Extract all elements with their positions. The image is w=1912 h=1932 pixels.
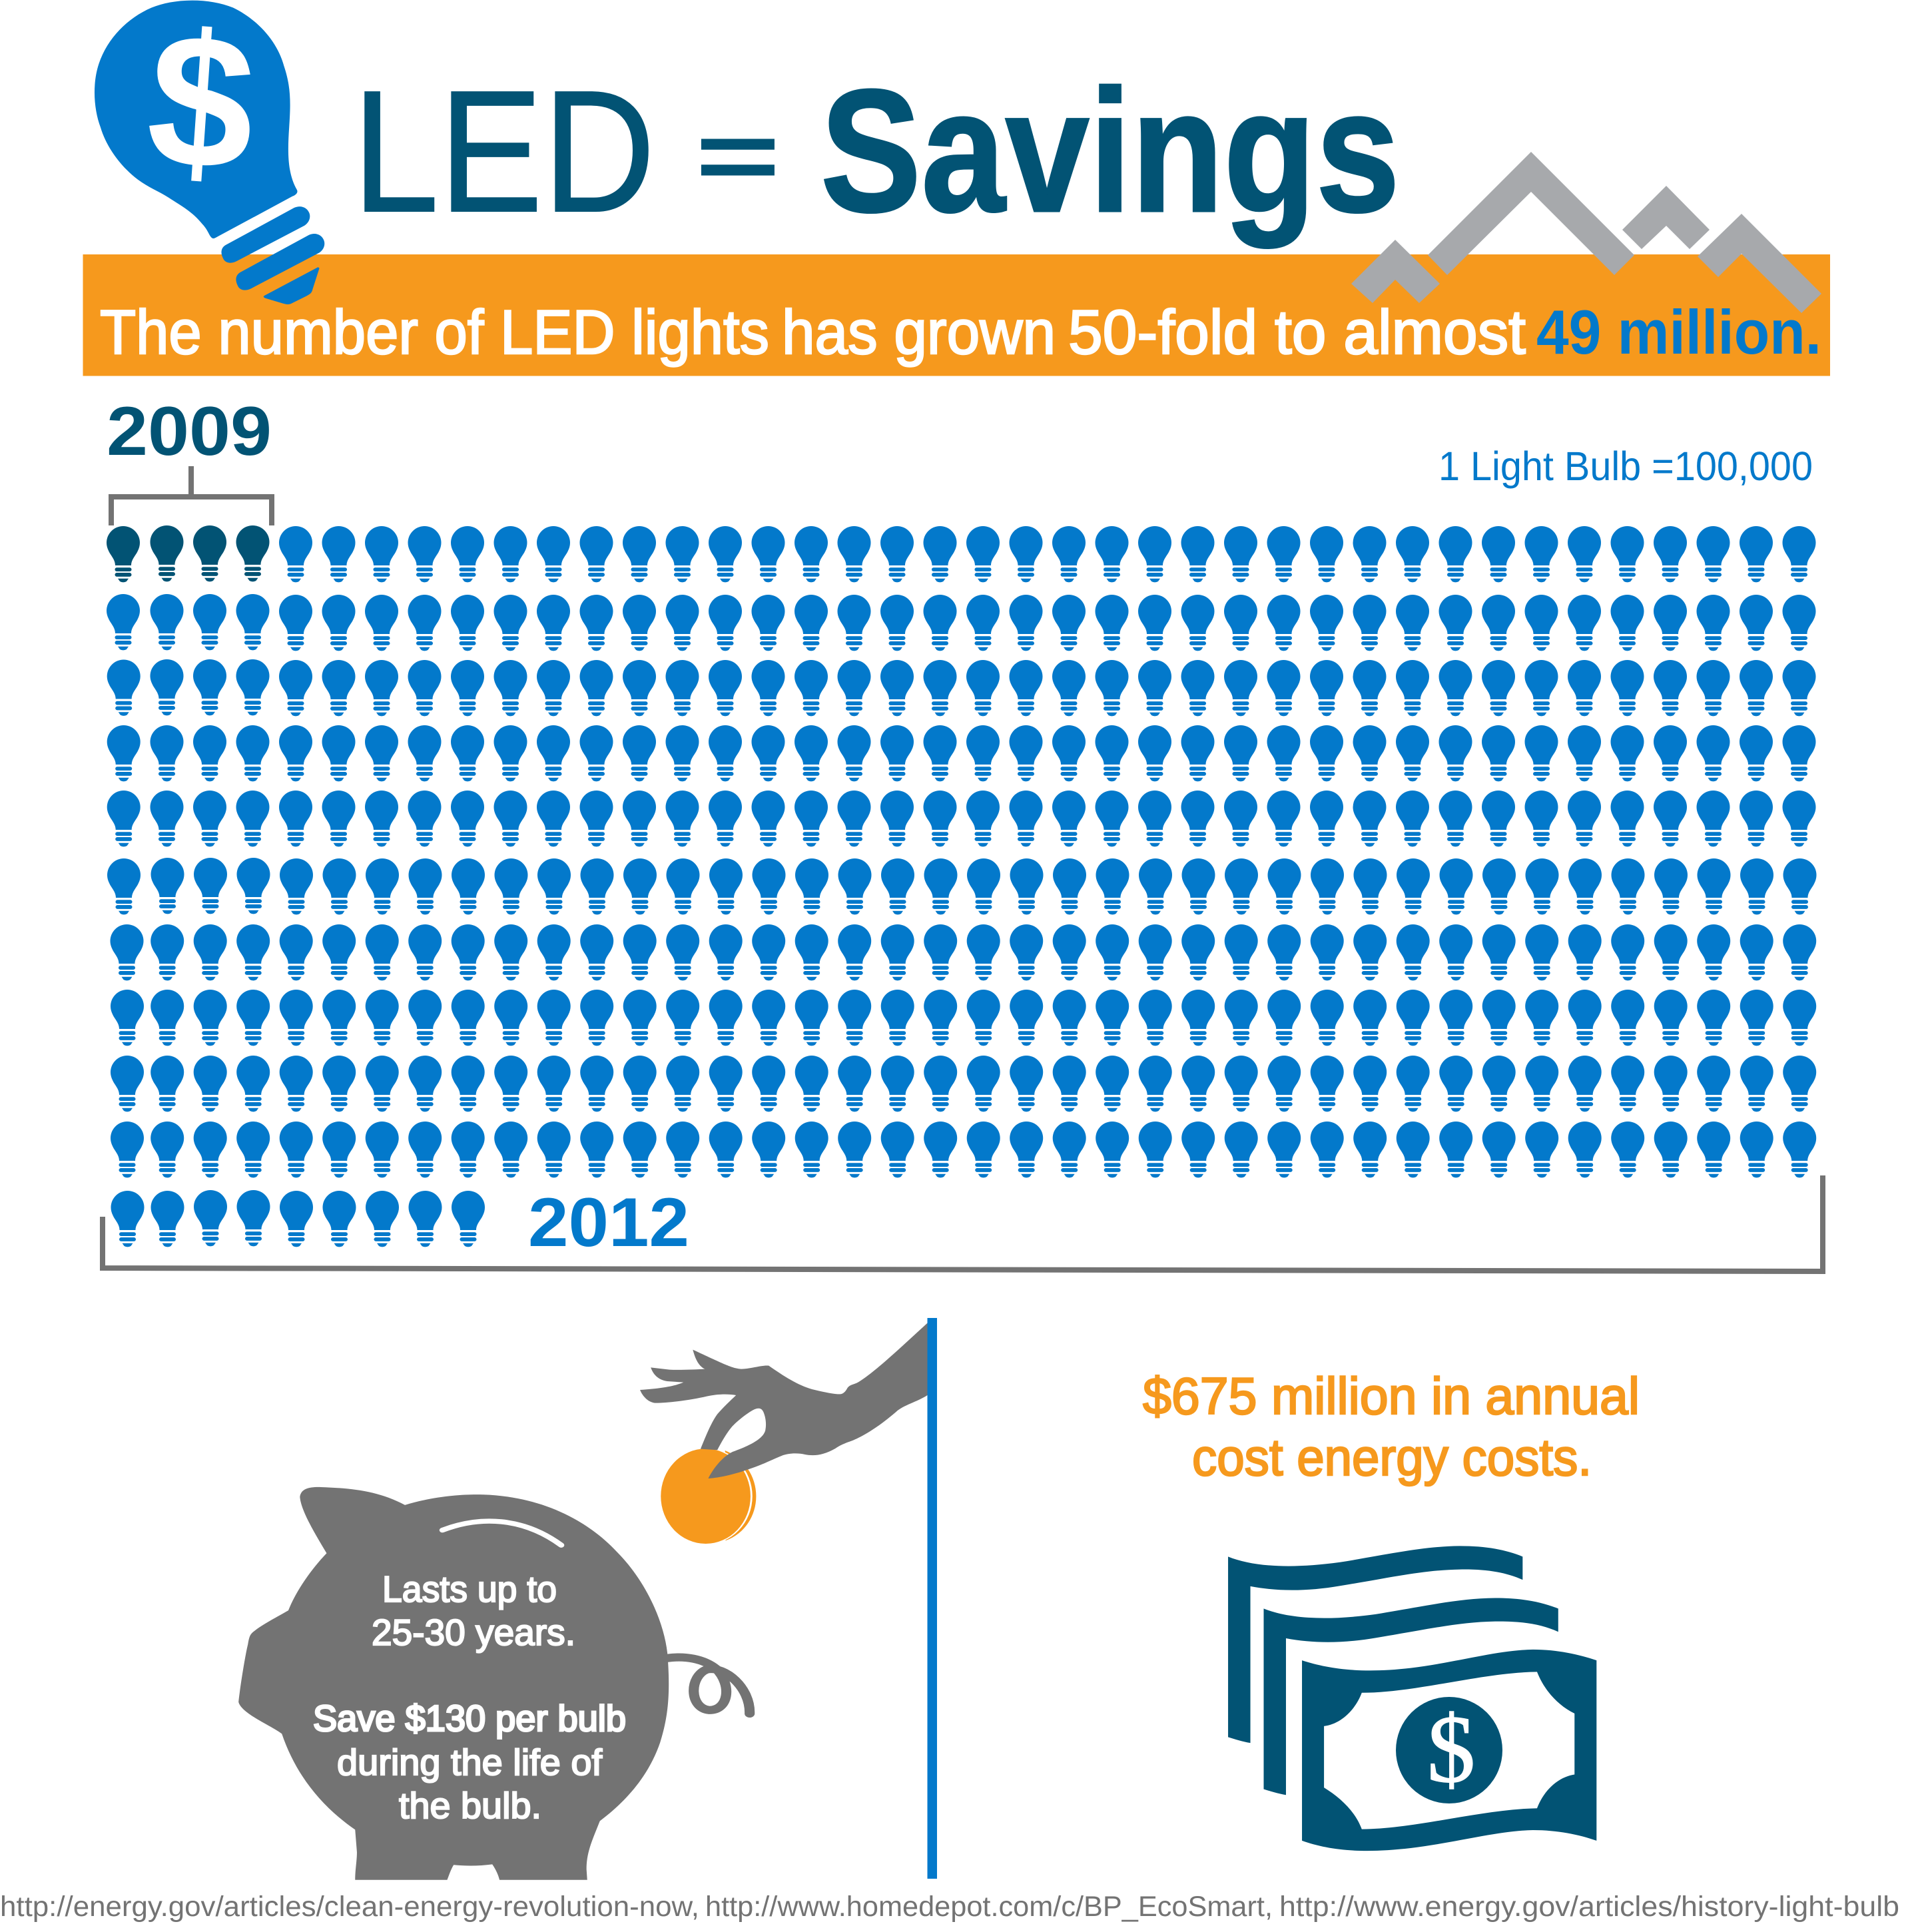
chart: bulb pictogram: [107, 525, 1817, 1247]
icon: stack of dollar bills: $: [1427, 1696, 1475, 1803]
bulb row 7: [111, 924, 1816, 980]
legend: bulb scale: 1 Light Bulb =100,000: [1438, 444, 1813, 489]
title: LED = Savings: =: [697, 98, 779, 213]
piggy bank text: Save $130 per bulb: [313, 1698, 626, 1739]
callout: annual energy costs: $675 million in annual: [1143, 1367, 1640, 1425]
bracket: 2009: [111, 466, 272, 525]
piggy bank text: during the life of: [337, 1742, 603, 1783]
banner text: LED growth: The number of LED lights: [100, 297, 769, 367]
source line: http://energy.gov/articles/clean-energy-revolution-now,: [0, 1891, 699, 1923]
banner text: LED growth: has grown: [782, 297, 1056, 367]
label: 2009: 2009: [107, 393, 272, 470]
bulb row 10: [111, 1122, 1816, 1177]
callout: annual energy costs: [1143, 1367, 1640, 1486]
bulb row 4: [107, 725, 1816, 781]
icon: grey mountains: [1351, 152, 1821, 313]
icon: piggy bank with text: [238, 1487, 750, 1880]
bulb row 5: [107, 791, 1816, 846]
bulb row 1: 2009 dark bulbs and blue bulbs: [107, 525, 1815, 582]
label: 2012: 2012: [528, 1184, 689, 1261]
icon: stack of dollar bills: [1228, 1546, 1596, 1851]
bulb row 3: [107, 659, 1816, 716]
title: LED = Savings: [352, 53, 1400, 249]
callout: annual energy costs: cost energy costs.: [1192, 1428, 1592, 1486]
bulb row 8: [111, 990, 1816, 1046]
orange banner: [83, 254, 1830, 376]
bulb row 9: [111, 1056, 1816, 1112]
icon: light bulb with dollar sign: [95, 0, 324, 304]
piggy bank text: the bulb.: [399, 1785, 541, 1826]
source line: http://www.energy.gov/articles/history-light-bulb: [1279, 1891, 1899, 1923]
source line: [0, 1891, 1899, 1923]
banner text: LED growth: 50-fold to almost: [1068, 297, 1526, 367]
banner text: LED growth: 49 million.: [1536, 297, 1821, 367]
bulb row 11: [111, 1190, 485, 1247]
bulb row 2: [107, 594, 1815, 651]
title: LED = Savings: LED: [352, 55, 655, 248]
piggy bank text: Lasts up to: [382, 1568, 557, 1610]
piggy bank text: [313, 1568, 626, 1826]
icon: hand dropping coin: [640, 1323, 928, 1544]
bracket: 2012: [103, 1175, 1823, 1271]
title: LED = Savings: Savings: [820, 53, 1400, 249]
bulb row 6: [107, 858, 1817, 914]
source line: http://www.homedepot.com/c/BP_EcoSmart,: [705, 1891, 1273, 1923]
banner text: LED growth: [100, 297, 1821, 367]
vertical divider: [927, 1318, 937, 1879]
piggy bank text: 25-30 years.: [372, 1612, 575, 1653]
